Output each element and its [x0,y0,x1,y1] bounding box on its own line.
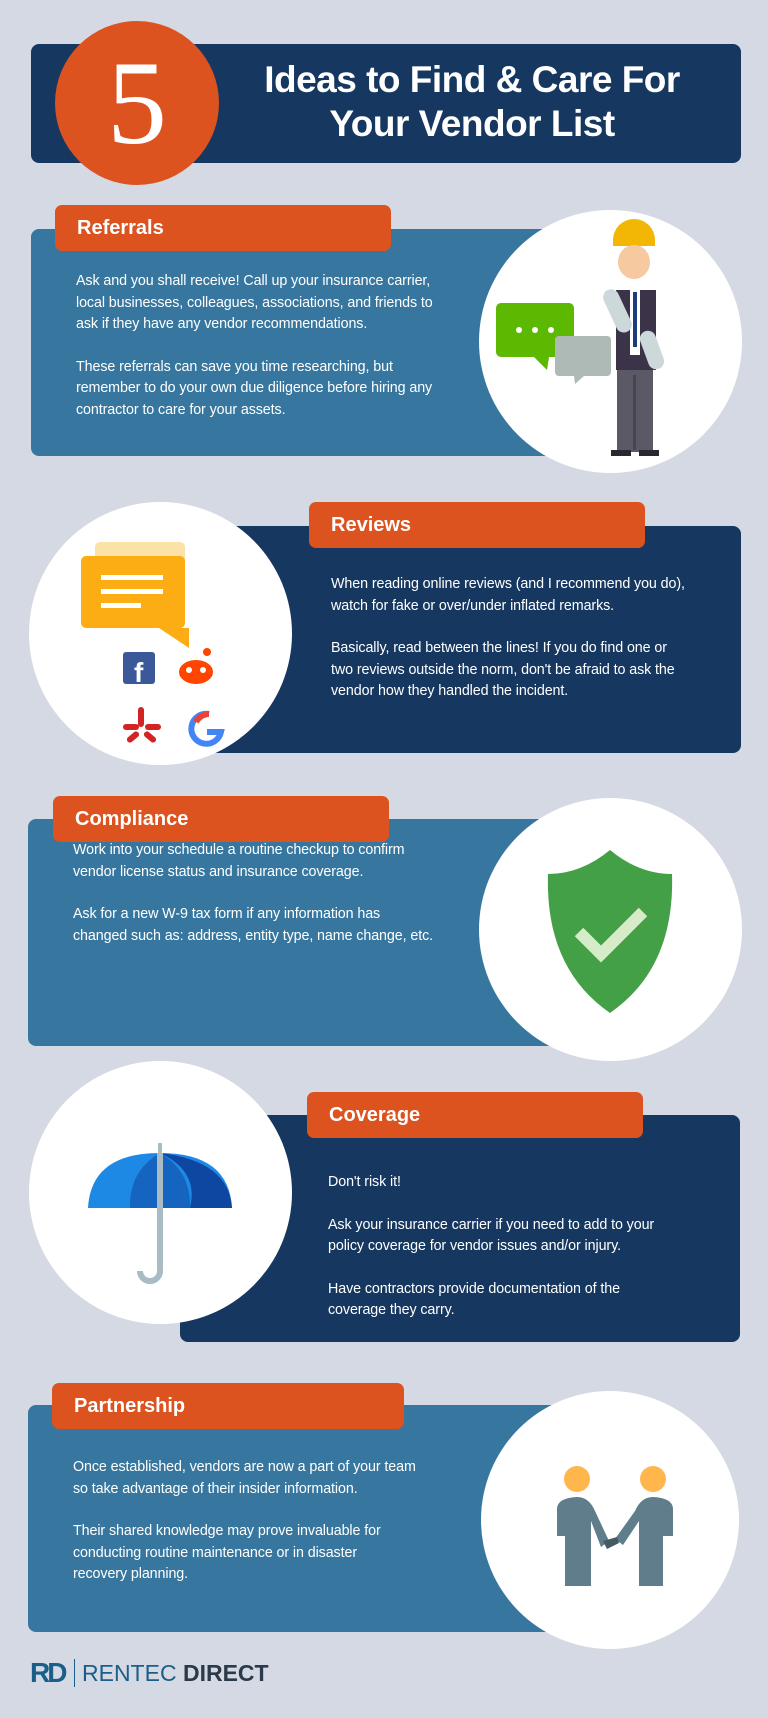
logo: rentec direct [30,1657,269,1688]
text: compliance: Ask for a new W-9 tax form if any information has [73,906,380,922]
text: reviews: vendor how they handled the incident. [331,683,568,699]
text: compliance: Work into your schedule a routine checkup to confirm [73,842,404,858]
text: coverage [328,1174,654,1318]
text: coverage: Don't risk it! [328,1174,401,1190]
icon: umbrella [29,1061,292,1324]
text: partnership: so take advantage of their insider information. [73,1480,358,1496]
text: reviews: watch for fake or over/under inflated remarks. [331,598,614,614]
heading: coverage [307,1092,643,1138]
text: partnership: Their shared knowledge may prove invaluable for [73,1523,381,1539]
icon: contractor with chat bubbles [479,210,742,473]
text: referrals: Ask and you shall receive! Call up your insurance carrier, [76,273,430,289]
heading: compliance [53,796,389,842]
panel: referrals [31,229,591,456]
panel: compliance [28,819,588,1046]
icon: review bubbles and logos [29,502,292,765]
text: coverage: Have contractors provide documentation of the [328,1280,620,1296]
icon: handshake [481,1391,739,1649]
text: partnership: Once established, vendors are now a part of your team [73,1459,416,1475]
header banner [31,44,741,163]
text: partnership [73,1459,416,1582]
text: referrals: local businesses, colleagues, associations, and friends to [76,294,433,310]
text: referrals: ask if they have any vendor recommendations. [76,316,367,332]
text: reviews [331,576,685,699]
title: Ideas to Find & Care For [264,59,680,100]
heading: reviews: Reviews [331,514,411,536]
icon: review bubbles and logos: f [134,657,144,688]
text: coverage: coverage they carry. [328,1302,454,1318]
text: compliance: changed such as: address, entity type, name change, etc. [73,928,433,944]
text: referrals: contractor to care for your assets. [76,402,285,418]
logo: rentec direct: RD [30,1657,64,1688]
text: partnership: recovery planning. [73,1566,188,1582]
text: coverage: Ask your insurance carrier if you need to add to your [328,1216,654,1232]
text: compliance: vendor license status and insurance coverage. [73,864,363,880]
panel: partnership [28,1405,588,1632]
heading: partnership [52,1383,404,1429]
icon: shield check [479,798,742,1061]
heading: referrals [55,205,391,251]
number circle [55,21,219,185]
text: referrals: remember to do your own due diligence before hiring any [76,380,432,396]
text: reviews: When reading online reviews (and I recommend you do), [331,576,685,592]
heading: coverage: Coverage [329,1104,420,1126]
text: reviews: two reviews outside the norm, don't be afraid to ask the [331,662,675,678]
heading: compliance: Compliance [75,808,188,830]
heading: referrals: Referrals [77,217,164,239]
text: compliance [73,842,433,944]
text: referrals: These referrals can save you time researching, but [76,358,393,374]
number circle: 5 [107,36,167,169]
title: Your Vendor List [329,103,615,144]
panel: reviews [180,526,741,753]
heading: reviews [309,502,645,548]
heading: partnership: Partnership [74,1395,185,1417]
text: partnership: conducting routine maintenance or in disaster [73,1544,357,1560]
panel: coverage [180,1115,740,1342]
text: coverage: policy coverage for vendor issues and/or injury. [328,1238,621,1254]
title [264,59,680,144]
logo: rentec direct: RENTEC DIRECT [82,1660,269,1686]
text: referrals [76,273,433,418]
text: reviews: Basically, read between the lines! If you do find one or [331,640,667,656]
